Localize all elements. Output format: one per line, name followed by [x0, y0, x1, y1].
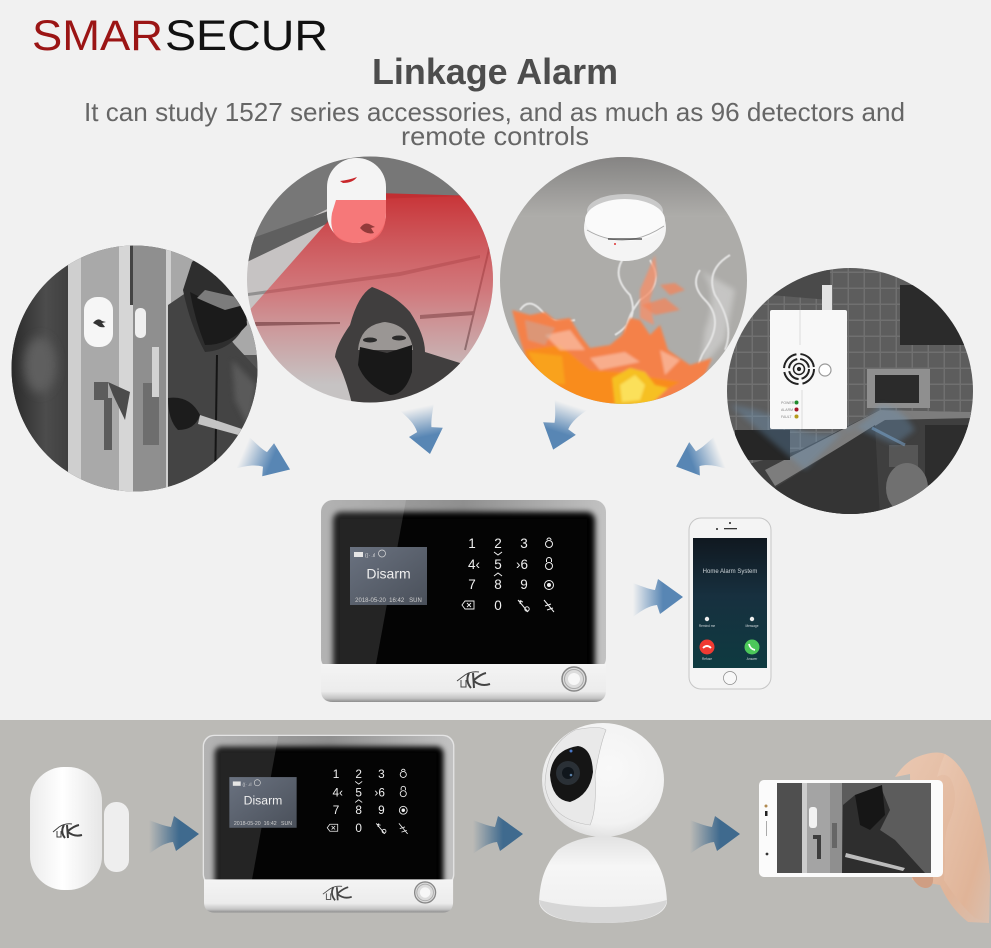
subtitle: remote controls [401, 121, 589, 151]
keypad: 4‹ [332, 786, 343, 799]
brand logo [32, 12, 328, 60]
arrow: door sensor to panel [236, 433, 297, 488]
photo circle: gas detector in kitchen: ALARM [781, 408, 793, 412]
photo circle: door sensor and burglar [11, 245, 261, 492]
LCD screen: ((· .ıl [242, 782, 251, 787]
arrow: panel to camera [473, 816, 523, 854]
subtitle: It can study 1527 series accessories, and as much as 96 detectors and [84, 97, 905, 127]
round button [562, 667, 586, 691]
title: Linkage Alarm [372, 51, 618, 92]
gas detector body [822, 285, 832, 311]
photo circle: PIR motion detector [247, 156, 500, 404]
photo circle: smoke detector and fire [500, 157, 748, 405]
photo circle: gas detector in kitchen: FAULT [781, 415, 792, 419]
smartphone incoming call: Home Alarm System [703, 569, 757, 575]
keypad: 0 [355, 822, 362, 835]
subtitle [84, 97, 905, 151]
thumb and fingers over phone [937, 754, 990, 923]
door sensor [84, 297, 113, 347]
smartphone incoming call: Message [746, 624, 759, 628]
keypad: 8 [355, 804, 362, 817]
photo circle: gas detector in kitchen: POWER [781, 401, 795, 405]
arrow: camera to phone [690, 816, 740, 854]
detection beam [247, 193, 500, 385]
microwave [867, 369, 930, 408]
PIR sensor [327, 158, 386, 243]
brand mark [323, 886, 352, 900]
LCD screen [229, 777, 297, 828]
LCD screen: Disarm [366, 566, 411, 582]
keypad: 7 [333, 804, 339, 817]
keypad: 9 [520, 577, 528, 592]
counter and cabinets [750, 410, 972, 514]
gas detector speaker [784, 354, 814, 384]
hooded man [335, 287, 470, 404]
LCD screen: 2018-05-20 16:42 SUN [234, 821, 292, 827]
crowbar and glove [198, 415, 242, 435]
brand mark [457, 672, 490, 688]
smartphone incoming call: Refuse [702, 657, 712, 661]
camera lens recess [545, 728, 606, 825]
lower finger [912, 877, 933, 888]
door handle [94, 382, 112, 450]
keypad: 5 [494, 557, 502, 572]
keypad: 1 [468, 536, 476, 551]
keypad: ›6 [374, 786, 385, 799]
leaking gas [730, 405, 915, 470]
keypad: 3 [378, 768, 385, 781]
keypad: 3 [520, 536, 528, 551]
smoke detector [584, 220, 666, 261]
LCD screen [350, 547, 427, 605]
keypad: 1 [333, 768, 339, 781]
IP camera [539, 723, 667, 923]
arrow: door sensor to panel, lower [149, 816, 199, 854]
keypad: 5 [355, 786, 362, 799]
door sensor product [30, 767, 129, 890]
keypad: 0 [494, 598, 502, 613]
brand logo: SMAR [32, 12, 163, 60]
LCD screen: 2018-05-20 16:42 SUN [355, 598, 422, 604]
burglar jacket [168, 290, 260, 492]
keypad: 7 [468, 577, 476, 592]
photo circle: gas detector in kitchen [727, 268, 975, 516]
keypad: ›6 [516, 557, 528, 572]
LCD screen: Disarm [244, 794, 282, 808]
LCD screen: ((· .ıl [365, 553, 375, 559]
keypad: 4‹ [468, 557, 480, 572]
keypad: 2 [355, 768, 362, 781]
keypad [327, 768, 408, 835]
smartphone incoming call: Answer [747, 657, 758, 661]
arrow: gas detector to panel [670, 433, 726, 485]
keypad: 8 [494, 577, 502, 592]
arrow: smoke detector to panel [536, 398, 587, 456]
refuse button [700, 640, 714, 654]
burglar balaclava [183, 258, 247, 352]
alarm control panel, lower [203, 735, 454, 913]
keypad: 2 [494, 536, 502, 551]
arrow: motion detector to panel [400, 403, 448, 458]
hand behind phone [895, 753, 990, 923]
gas cylinder [889, 445, 918, 467]
smartphone incoming call: Remind me [699, 624, 715, 628]
smoke wisps [519, 254, 731, 364]
fire [512, 255, 712, 405]
brand logo: SECUR [165, 12, 328, 60]
smartphone incoming call [689, 518, 771, 689]
brand mark [53, 824, 82, 838]
arrow: panel to phone [633, 579, 683, 617]
round button [415, 882, 436, 903]
keypad: 9 [378, 804, 385, 817]
smartphone with live video [759, 780, 943, 877]
keypad [462, 536, 554, 613]
alarm control panel, upper [321, 500, 606, 702]
answer button [744, 640, 760, 654]
grey lower band [0, 720, 991, 948]
